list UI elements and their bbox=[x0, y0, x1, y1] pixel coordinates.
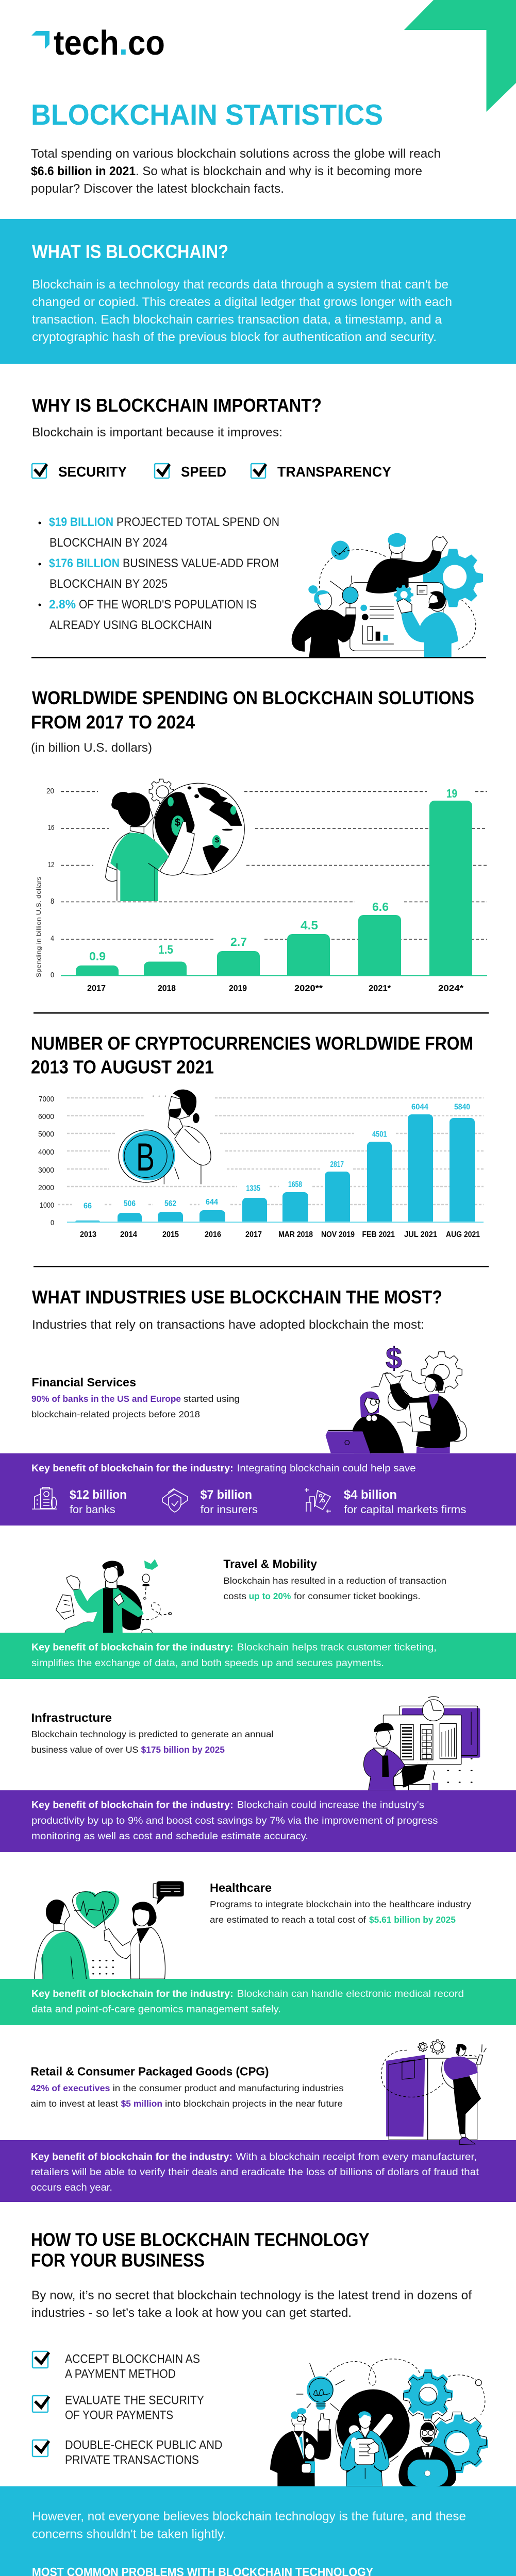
heading: how to use blockchain: FOR YOUR BUSINESS bbox=[31, 2249, 205, 2270]
bullet list: key statistics: $176 BILLION bbox=[49, 556, 120, 570]
text: retail stat: 42% of executives bbox=[31, 2083, 110, 2093]
checklist: security speed transparency: SPEED bbox=[181, 464, 226, 480]
bar chart: cryptocurrencies: 6044 bbox=[411, 1103, 428, 1112]
checklist: how to steps: A PAYMENT METHOD bbox=[65, 2367, 176, 2381]
panel: retail and CPG bbox=[0, 2040, 516, 2202]
bullet list: key statistics: BLOCKCHAIN BY 2025 bbox=[49, 577, 168, 591]
heading: infrastructure: Infrastructure bbox=[31, 1711, 112, 1724]
text: key benefit: Integrating blockchain could help save bbox=[237, 1463, 416, 1474]
bar chart: cryptocurrencies: FEB 2021 bbox=[362, 1230, 395, 1239]
bar chart: cryptocurrencies: 644 bbox=[206, 1198, 218, 1207]
stat: banks bbox=[32, 1487, 127, 1516]
text: key benefit: Key benefit of blockchain for the industry: bbox=[31, 1463, 234, 1474]
bar chart: cryptocurrencies: 506 bbox=[124, 1199, 136, 1208]
text: chart unit: (in billion U.S. dollars) bbox=[31, 741, 152, 755]
bar chart: cryptocurrencies: MAR 2018 bbox=[278, 1230, 313, 1239]
bar chart: cryptocurrencies: 3000 bbox=[38, 1166, 54, 1175]
bar chart: cryptocurrencies: 2016 bbox=[205, 1230, 221, 1239]
bar chart: worldwide spending: 2020** bbox=[294, 983, 323, 993]
text: concerns: However, not everyone believes blockchain technology is the future, and these bbox=[32, 2510, 466, 2523]
text: travel stat: Blockchain has resulted in a reduction of transaction bbox=[223, 1575, 446, 1586]
band: retail key benefit: With a blockchain receipt from every manufacturer, bbox=[236, 2151, 477, 2162]
text: how to intro: industries - so let’s take a look at how you can get started. bbox=[31, 2306, 352, 2320]
stat: capital markets: $4 billion bbox=[344, 1488, 397, 1502]
checklist: how to steps: DOUBLE-CHECK PUBLIC AND bbox=[65, 2438, 223, 2452]
band: retail key benefit bbox=[0, 2140, 516, 2202]
text: infrastructure stat bbox=[31, 1729, 273, 1755]
bullet list: key statistics: $19 BILLION bbox=[49, 515, 113, 529]
heading: how to use blockchain: HOW TO USE BLOCKCHAIN TECHNOLOGY bbox=[31, 2229, 370, 2250]
bar chart: cryptocurrencies: NOV 2019 bbox=[321, 1230, 355, 1239]
heading: worldwide spending: WORLDWIDE SPENDING ON BLOCKCHAIN SOLUTIONS bbox=[32, 687, 474, 708]
text: healthcare stat bbox=[210, 1899, 471, 1925]
text: how to intro bbox=[31, 2289, 472, 2320]
band: retail key benefit: retailers will be able to verify their deals and eradicate the loss of billions of dollars of fraud that bbox=[31, 2167, 479, 2178]
bar chart: worldwide spending: 19 bbox=[446, 787, 457, 800]
illustration: woman pointing at globe: $ bbox=[215, 836, 219, 844]
heading: what is blockchain: WHAT IS BLOCKCHAIN? bbox=[32, 241, 228, 262]
bar chart: worldwide spending: Spending in billion U.S. dollars bbox=[35, 877, 42, 978]
bar chart: cryptocurrencies: 4501 bbox=[372, 1130, 387, 1139]
bar chart: worldwide spending: 16 bbox=[48, 823, 54, 832]
illustration: team with lightbulb and gears bbox=[270, 2359, 488, 2486]
bar chart: worldwide spending: 1.5 bbox=[158, 943, 173, 956]
bar chart: worldwide spending: 2021* bbox=[369, 983, 391, 993]
divider bbox=[34, 1266, 489, 1267]
bar chart: cryptocurrencies bbox=[38, 1095, 484, 1239]
band: travel key benefit: Blockchain helps track customer ticketing, bbox=[237, 1642, 437, 1653]
band: infrastructure key benefit: productivity by up to 9% and boost cost savings by 7% via the improvement of progress bbox=[31, 1816, 438, 1826]
bar chart: cryptocurrencies: 1658 bbox=[288, 1180, 302, 1189]
bar chart: worldwide spending: 0.9 bbox=[89, 950, 106, 963]
illustration: woman pointing at globe: $ bbox=[175, 817, 180, 828]
stat: capital markets bbox=[305, 1488, 466, 1516]
divider bbox=[34, 1012, 489, 1014]
text: banks stat: 90% of banks in the US and Europe bbox=[31, 1394, 181, 1404]
text: healthcare stat: Programs to integrate blockchain into the healthcare industry bbox=[210, 1899, 471, 1909]
text: infrastructure stat: $175 billion by 2025 bbox=[141, 1744, 225, 1755]
checklist: security speed transparency bbox=[32, 464, 391, 480]
band: retail key benefit: occurs each year. bbox=[31, 2182, 112, 2193]
bar chart: worldwide spending: 0 bbox=[51, 971, 54, 979]
illustration: doctor and patient with heart bbox=[34, 1881, 184, 1979]
bar chart: cryptocurrencies: 1000 bbox=[40, 1201, 54, 1210]
text block: definition: Blockchain is a technology that records data through a system that can't be bbox=[32, 278, 448, 292]
bar chart: cryptocurrencies: 66 bbox=[84, 1201, 92, 1211]
text: retail stat: into blockchain projects in the near future bbox=[165, 2098, 343, 2109]
bar chart: cryptocurrencies: 5000 bbox=[38, 1130, 54, 1139]
text: retail stat: aim to invest at least bbox=[31, 2098, 118, 2109]
panel: travel and mobility bbox=[0, 1557, 516, 1679]
stat: banks: for banks bbox=[70, 1504, 115, 1516]
text: important because: Blockchain is important because it improves: bbox=[32, 426, 282, 439]
divider bbox=[31, 657, 486, 658]
heading: number of cryptocurrencies bbox=[31, 1032, 473, 1078]
bar chart: worldwide spending: 2.7 bbox=[230, 935, 247, 948]
text block: definition: transaction. Each blockchain carries transaction data, a timestamp, and a bbox=[32, 313, 442, 327]
band: healthcare key benefit bbox=[0, 1979, 516, 2025]
bar chart: cryptocurrencies: JUL 2021 bbox=[404, 1230, 437, 1239]
bar chart: worldwide spending: 6.6 bbox=[372, 900, 389, 913]
text: travel stat: costs bbox=[223, 1591, 246, 1601]
bullet list: key statistics bbox=[38, 515, 279, 632]
heading: number of cryptocurrencies: NUMBER OF CRYPTOCURRENCIES WORLDWIDE FROM bbox=[31, 1032, 473, 1054]
text block: definition: cryptographic hash of the previous block for authentication and security. bbox=[32, 330, 437, 344]
bar chart: cryptocurrencies: 562 bbox=[164, 1199, 176, 1208]
heading: financial services: Financial Services bbox=[32, 1376, 136, 1389]
intro text block: $6.6 billion in 2021 bbox=[31, 164, 136, 178]
text: key benefit bbox=[31, 1463, 416, 1474]
bullet list: key statistics: BUSINESS VALUE-ADD FROM bbox=[123, 556, 279, 570]
illustration: traveller with backpack bbox=[56, 1559, 172, 1633]
stat: banks: $12 billion bbox=[70, 1488, 127, 1502]
checklist: how to steps: ACCEPT BLOCKCHAIN AS bbox=[65, 2352, 200, 2366]
band: travel key benefit: Key benefit of blockchain for the industry: bbox=[31, 1642, 234, 1653]
intro text block: . So what is blockchain and why is it becoming more bbox=[136, 164, 422, 178]
band: infrastructure key benefit: Key benefit of blockchain for the industry: bbox=[31, 1800, 234, 1810]
text: travel stat bbox=[223, 1575, 446, 1601]
intro text block bbox=[31, 147, 441, 196]
band: healthcare key benefit: Blockchain can handle electronic medical record bbox=[237, 1989, 464, 1999]
band: healthcare key benefit: Key benefit of blockchain for the industry: bbox=[31, 1989, 234, 1999]
checklist: security speed transparency: TRANSPARENCY bbox=[277, 464, 391, 480]
bar chart: cryptocurrencies: 2013 bbox=[80, 1230, 96, 1239]
band: financial key benefit bbox=[0, 1453, 516, 1526]
bar chart: worldwide spending: 2017 bbox=[87, 983, 106, 993]
bullet list: key statistics: PROJECTED TOTAL SPEND ON bbox=[116, 515, 279, 529]
heading: why is blockchain important: WHY IS BLOCKCHAIN IMPORTANT? bbox=[32, 395, 322, 416]
bar chart: cryptocurrencies: 0 bbox=[51, 1218, 54, 1227]
text: retail stat: in the consumer product and manufacturing industries bbox=[113, 2083, 344, 2093]
band: infrastructure key benefit bbox=[0, 1790, 516, 1852]
checklist: security speed transparency: SECURITY bbox=[58, 464, 127, 480]
text: retail stat bbox=[31, 2083, 344, 2109]
panel: infrastructure bbox=[0, 1697, 516, 1852]
bar chart: worldwide spending bbox=[35, 787, 487, 993]
heading: worldwide spending: FROM 2017 TO 2024 bbox=[31, 711, 195, 733]
illustration: two colleagues with dollar sign bbox=[326, 1342, 467, 1453]
panel: concerns and problems bbox=[0, 2486, 516, 2576]
bullet list: key statistics: BLOCKCHAIN BY 2024 bbox=[49, 536, 168, 550]
illustration: engineer with building plans bbox=[363, 1697, 480, 1790]
band: travel key benefit bbox=[0, 1633, 516, 1679]
logo: tech.co: tech.co bbox=[54, 24, 165, 62]
text: industries intro: Industries that rely on transactions have adopted blockchain the most: bbox=[32, 1318, 424, 1332]
checklist: how to steps: OF YOUR PAYMENTS bbox=[65, 2409, 173, 2422]
bar chart: worldwide spending: 2018 bbox=[158, 983, 176, 993]
band: retail key benefit: Key benefit of blockchain for the industry: bbox=[31, 2151, 232, 2162]
bar chart: cryptocurrencies: 2000 bbox=[38, 1183, 54, 1192]
heading: number of cryptocurrencies: 2013 TO AUGUST 2021 bbox=[31, 1056, 214, 1078]
checklist: how to steps: PRIVATE TRANSACTIONS bbox=[65, 2453, 199, 2467]
bar chart: cryptocurrencies: 1335 bbox=[246, 1184, 260, 1193]
panel: what is blockchain bbox=[0, 219, 516, 364]
panel: financial services bbox=[0, 1342, 516, 1526]
bar chart: worldwide spending: 20 bbox=[46, 787, 54, 795]
heading: what industries: WHAT INDUSTRIES USE BLOCKCHAIN THE MOST? bbox=[32, 1286, 442, 1308]
text: concerns bbox=[32, 2510, 466, 2541]
band: travel key benefit: simplifies the exchange of data, and both speeds up and secures payments. bbox=[31, 1658, 384, 1669]
bullet list: key statistics: OF THE WORLD'S POPULATION IS bbox=[79, 598, 257, 612]
heading: how to use blockchain bbox=[31, 2229, 370, 2270]
text: infrastructure stat: business value of over US bbox=[31, 1744, 138, 1755]
stat: capital markets: for capital markets firms bbox=[344, 1504, 466, 1516]
illustration: two colleagues with dollar sign: $ bbox=[386, 1342, 402, 1375]
bar chart: cryptocurrencies: AUG 2021 bbox=[446, 1230, 480, 1239]
text: banks stat: started using bbox=[184, 1394, 240, 1404]
bar chart: worldwide spending: 2024* bbox=[438, 983, 463, 993]
title: BLOCKCHAIN STATISTICS bbox=[31, 98, 383, 131]
bar chart: cryptocurrencies: 7000 bbox=[39, 1095, 54, 1104]
bar chart: cryptocurrencies: 2015 bbox=[162, 1230, 179, 1239]
illustration: woman pointing at globe bbox=[106, 779, 244, 901]
bar chart: worldwide spending: 2019 bbox=[229, 983, 247, 993]
text: healthcare stat: are estimated to reach a total cost of bbox=[210, 1914, 366, 1925]
text: banks stat bbox=[31, 1394, 240, 1419]
bar chart: worldwide spending: 8 bbox=[51, 897, 54, 906]
text: how to intro: By now, it’s no secret that blockchain technology is the latest trend in dozens of bbox=[31, 2289, 472, 2302]
bar chart: worldwide spending: 4 bbox=[51, 934, 54, 943]
green corner arrow decoration bbox=[404, 0, 516, 112]
panel: healthcare bbox=[0, 1881, 516, 2025]
heading: healthcare: Healthcare bbox=[210, 1881, 272, 1894]
band: healthcare key benefit: data and point-of-care genomics management safely. bbox=[31, 2004, 281, 2015]
bar chart: cryptocurrencies: 2014 bbox=[120, 1230, 137, 1239]
bullet list: key statistics: 2.8% bbox=[49, 598, 76, 612]
stat: insurers: $7 billion bbox=[201, 1488, 252, 1502]
bar chart: cryptocurrencies: 6000 bbox=[38, 1112, 54, 1121]
illustration: man with bitcoin: B bbox=[136, 1136, 155, 1179]
intro text block: popular? Discover the latest blockchain facts. bbox=[31, 182, 284, 196]
text: banks stat: blockchain-related projects before 2018 bbox=[31, 1409, 200, 1419]
text: travel stat: up to 20% bbox=[249, 1591, 291, 1601]
heading: worldwide spending bbox=[31, 687, 474, 733]
heading: travel and mobility: Travel & Mobility bbox=[223, 1557, 317, 1571]
text: infrastructure stat: Blockchain technology is predicted to generate an annual bbox=[31, 1729, 273, 1739]
text: healthcare stat: $5.61 billion by 2025 bbox=[369, 1914, 456, 1925]
heading: retail and CPG: Retail & Consumer Packaged Goods (CPG) bbox=[31, 2065, 269, 2078]
bar chart: worldwide spending: 4.5 bbox=[301, 919, 318, 932]
illustration: man leaning on parcel box bbox=[381, 2040, 486, 2145]
stat: insurers: for insurers bbox=[201, 1504, 258, 1516]
text block: definition bbox=[32, 278, 452, 344]
band: infrastructure key benefit: Blockchain could increase the industry's bbox=[237, 1800, 424, 1810]
text: concerns: concerns shouldn't be taken lightly. bbox=[32, 2528, 226, 2541]
bar chart: cryptocurrencies: 2017 bbox=[245, 1230, 262, 1239]
illustration: team with gears and dashboard bbox=[292, 533, 483, 657]
stat: insurers bbox=[162, 1488, 258, 1516]
bar chart: worldwide spending: 12 bbox=[48, 860, 54, 869]
intro text block: Total spending on various blockchain solutions across the globe will reach bbox=[31, 147, 441, 161]
bullet list: key statistics: ALREADY USING BLOCKCHAIN bbox=[49, 618, 212, 632]
band: infrastructure key benefit: monitoring as well as cost and schedule estimate accuracy. bbox=[31, 1831, 308, 1842]
bar chart: cryptocurrencies: 4000 bbox=[38, 1148, 54, 1157]
bar chart: cryptocurrencies: 2817 bbox=[330, 1160, 344, 1169]
illustration: man with bitcoin bbox=[119, 1090, 211, 1184]
checklist: how to steps: EVALUATE THE SECURITY bbox=[65, 2394, 204, 2408]
bar chart: cryptocurrencies: 5840 bbox=[454, 1103, 470, 1112]
text block: definition: changed or copied. This creates a digital ledger that grows longer with each bbox=[32, 295, 452, 309]
checklist: how to steps bbox=[32, 2351, 223, 2467]
text: retail stat: $5 million bbox=[121, 2098, 162, 2109]
text: travel stat: for consumer ticket bookings. bbox=[294, 1591, 421, 1601]
